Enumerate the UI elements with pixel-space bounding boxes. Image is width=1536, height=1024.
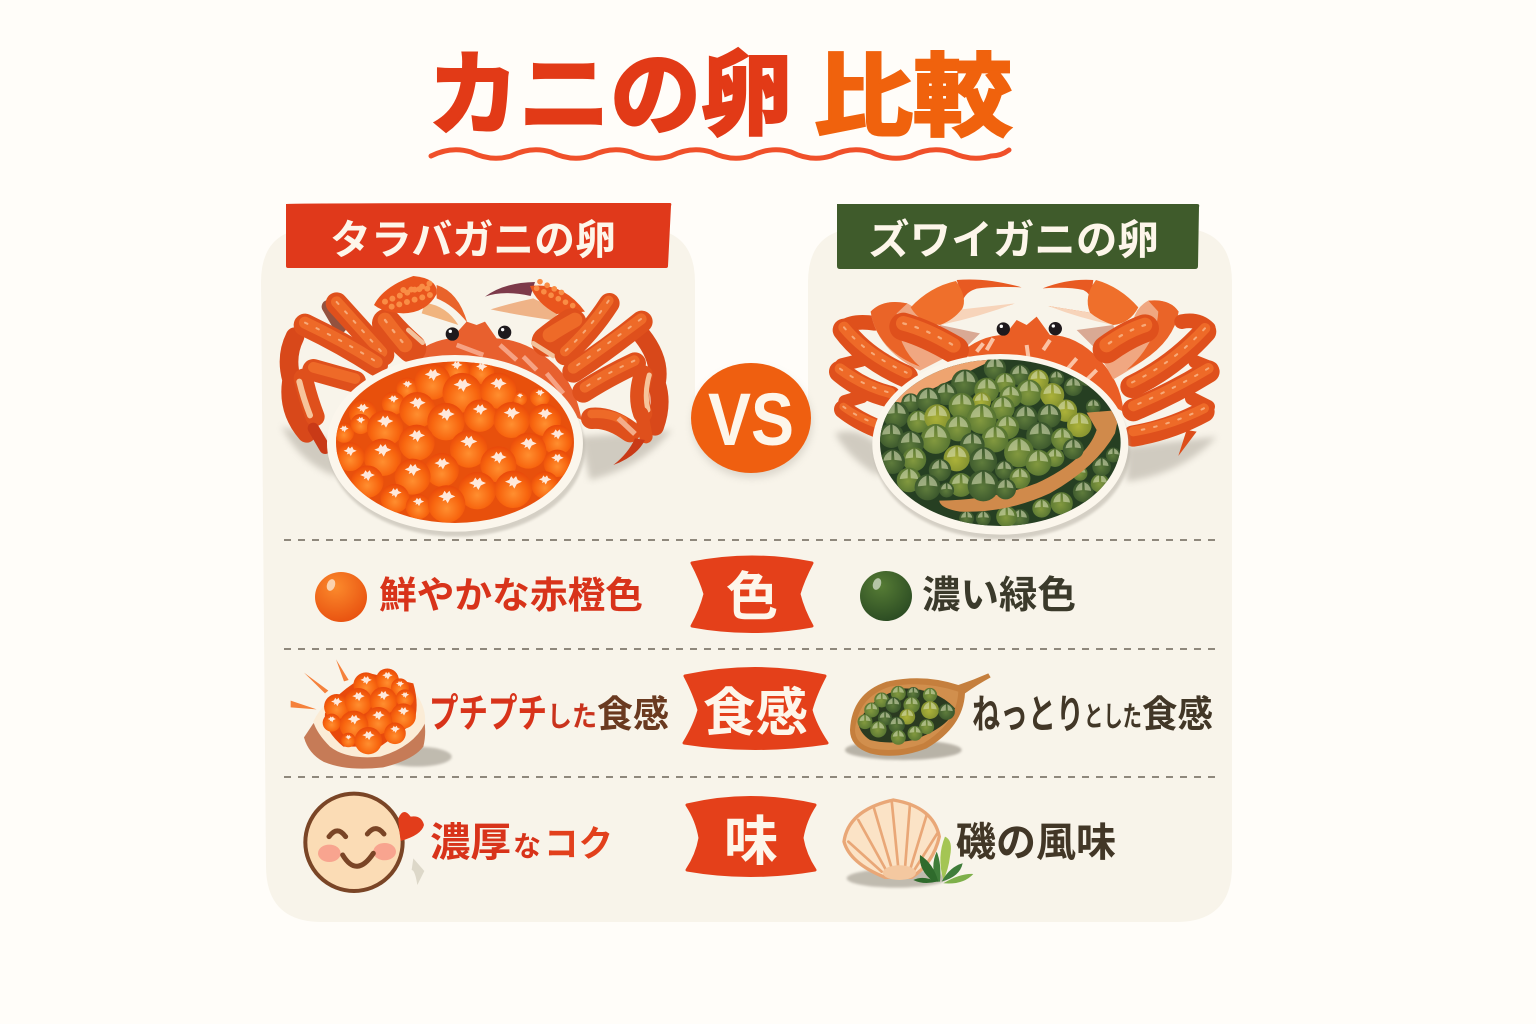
orange roe	[333, 357, 577, 527]
plate shadow	[328, 360, 585, 537]
orange ball	[315, 572, 367, 622]
label: taste: 味	[724, 812, 778, 872]
row: taste	[305, 794, 1116, 891]
left claw	[374, 276, 467, 348]
text: rich body: 濃厚	[430, 821, 511, 865]
text: seaside flavor: 磯の風味	[956, 821, 1116, 865]
wooden spoon	[939, 410, 1120, 512]
label: texture: 食感	[703, 685, 808, 743]
text: sticky texture: 食感	[1142, 694, 1213, 735]
header: green snow crab roe: ズワイガニの卵	[868, 217, 1159, 263]
title	[428, 45, 1012, 158]
header: green snow crab roe	[837, 204, 1199, 269]
VS badge	[691, 363, 812, 478]
crab legs left	[840, 322, 907, 428]
crab eyes	[997, 322, 1062, 336]
green ball	[860, 571, 912, 621]
text: rich body	[430, 821, 613, 865]
text: sticky texture: ねっとり	[972, 693, 1084, 737]
label: color: 色	[726, 569, 778, 627]
plate rim	[327, 355, 583, 532]
crab shadows	[282, 427, 672, 480]
infographic canvas	[261, 46, 1232, 922]
text: popping texture: 食感	[597, 694, 669, 735]
crab body highlights	[977, 338, 1097, 383]
illustration: king crab with orange roe	[282, 276, 672, 537]
row dividers	[284, 540, 1216, 777]
illustration: snow crab with green roe	[835, 279, 1217, 539]
plate shadow	[873, 361, 1130, 539]
panel: comparison background	[261, 228, 1232, 922]
wavy underline	[431, 150, 1009, 158]
right claw	[485, 282, 585, 356]
header: red king crab roe	[286, 203, 671, 268]
crab legs right	[565, 301, 660, 465]
icon: smiling face	[305, 794, 424, 891]
text: rich body: な	[513, 831, 541, 862]
roe on the spoon	[879, 357, 1092, 501]
row: color	[315, 557, 1076, 632]
icon: roe on bread	[291, 659, 452, 769]
icon: scallop shell with seaweed	[844, 800, 973, 888]
plate rim	[872, 354, 1128, 535]
arm shadow	[933, 325, 1120, 350]
text: bright red-orange: 鮮やかな赤橙色	[379, 575, 643, 616]
crab body highlights	[457, 345, 563, 393]
ribbon: taste	[687, 798, 815, 876]
text: sticky texture	[972, 693, 1213, 737]
text: deep green: 濃い緑色	[922, 575, 1076, 617]
roe under the spoon	[959, 367, 1121, 528]
crab body	[958, 317, 1123, 412]
crab eyes	[446, 326, 511, 341]
row: texture	[291, 659, 1213, 769]
ribbon: texture	[684, 668, 827, 748]
left claw	[871, 279, 1022, 371]
icon: spoon with green roe	[845, 673, 991, 760]
text: sticky texture: とした	[1084, 701, 1142, 732]
crab legs right	[1132, 321, 1212, 456]
right claw	[1043, 280, 1179, 379]
crab shadows	[835, 431, 1217, 482]
text: rich body: コク	[544, 823, 613, 864]
header: red king crab roe: タラバガニの卵	[330, 217, 616, 263]
crab legs left	[289, 302, 383, 448]
crab body	[412, 322, 582, 420]
title text: crab roe: カニの卵	[428, 45, 792, 147]
text: popping texture: プチプチ	[429, 692, 547, 736]
VS badge: VS	[708, 378, 794, 461]
ribbon: color	[692, 557, 812, 632]
title text: comparison: 比較	[814, 48, 1012, 148]
text: popping texture: した	[547, 701, 597, 732]
text: popping texture	[429, 692, 669, 736]
green roe and spoon	[877, 357, 1123, 530]
